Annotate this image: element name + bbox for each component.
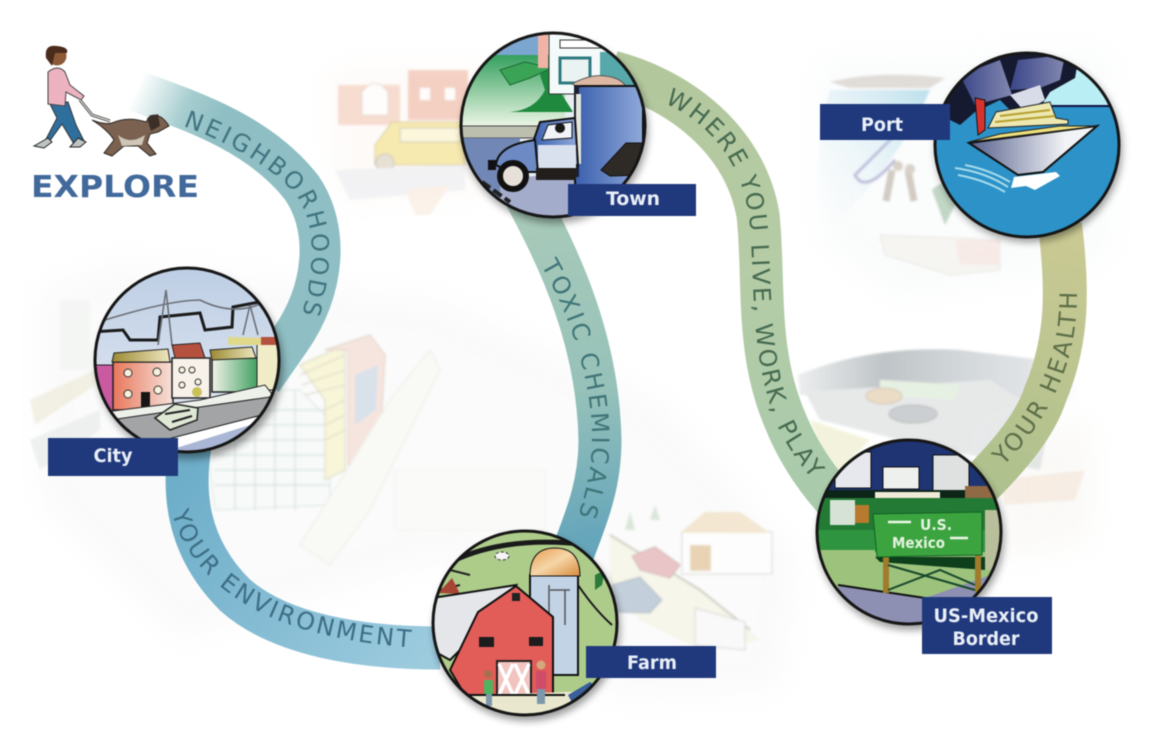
- label: city: [48, 438, 178, 476]
- border scenery: [798, 349, 1085, 400]
- icon circle: city: [90, 262, 290, 462]
- town scenery: [338, 85, 400, 125]
- band label: neighborhoods: NEIGHBORHOODS: [184, 110, 330, 316]
- farm scenery: [610, 535, 760, 650]
- city scenery: [200, 390, 330, 510]
- label: port: Port: [861, 114, 903, 136]
- icon circle: town: [460, 32, 648, 223]
- icon circle: farm: [430, 530, 620, 721]
- label: town: [568, 184, 696, 216]
- label: farm: Farm: [627, 652, 677, 674]
- icon circle: port: [935, 50, 1125, 242]
- sign text: U.S.: [920, 516, 952, 534]
- label: us-mexico border: Border: [952, 628, 1020, 650]
- label: city: City: [94, 445, 133, 467]
- heading: explore: EXPLORE: [31, 170, 199, 205]
- band label: toxic chemicals: TOXIC CHEMICALS: [544, 256, 610, 518]
- band label: your health: YOUR HEALTH: [990, 293, 1078, 462]
- path band: your health: [980, 225, 1065, 485]
- path band: your environment: [187, 445, 440, 648]
- sign text: Mexico: [892, 534, 945, 552]
- sign text: [892, 516, 952, 552]
- label: us-mexico border: [922, 597, 1052, 654]
- label: us-mexico border: US-Mexico: [934, 605, 1038, 627]
- icon circle: us-mexico border: [815, 438, 1007, 630]
- path band: toxic chemicals: [525, 195, 600, 560]
- port scenery: [815, 90, 930, 240]
- label: port: [820, 104, 950, 140]
- icon: person walking dog: [34, 46, 169, 156]
- label: town: Town: [606, 188, 660, 210]
- label: farm: [586, 646, 716, 678]
- path band: where you live, work, play: [612, 72, 840, 505]
- band label: your environment: YOUR ENVIRONMENT: [174, 507, 412, 648]
- path band: neighborhoods: [118, 84, 320, 380]
- band label: where you live, work, play: WHERE YOU LIVE, WORK, PLAY: [668, 87, 826, 474]
